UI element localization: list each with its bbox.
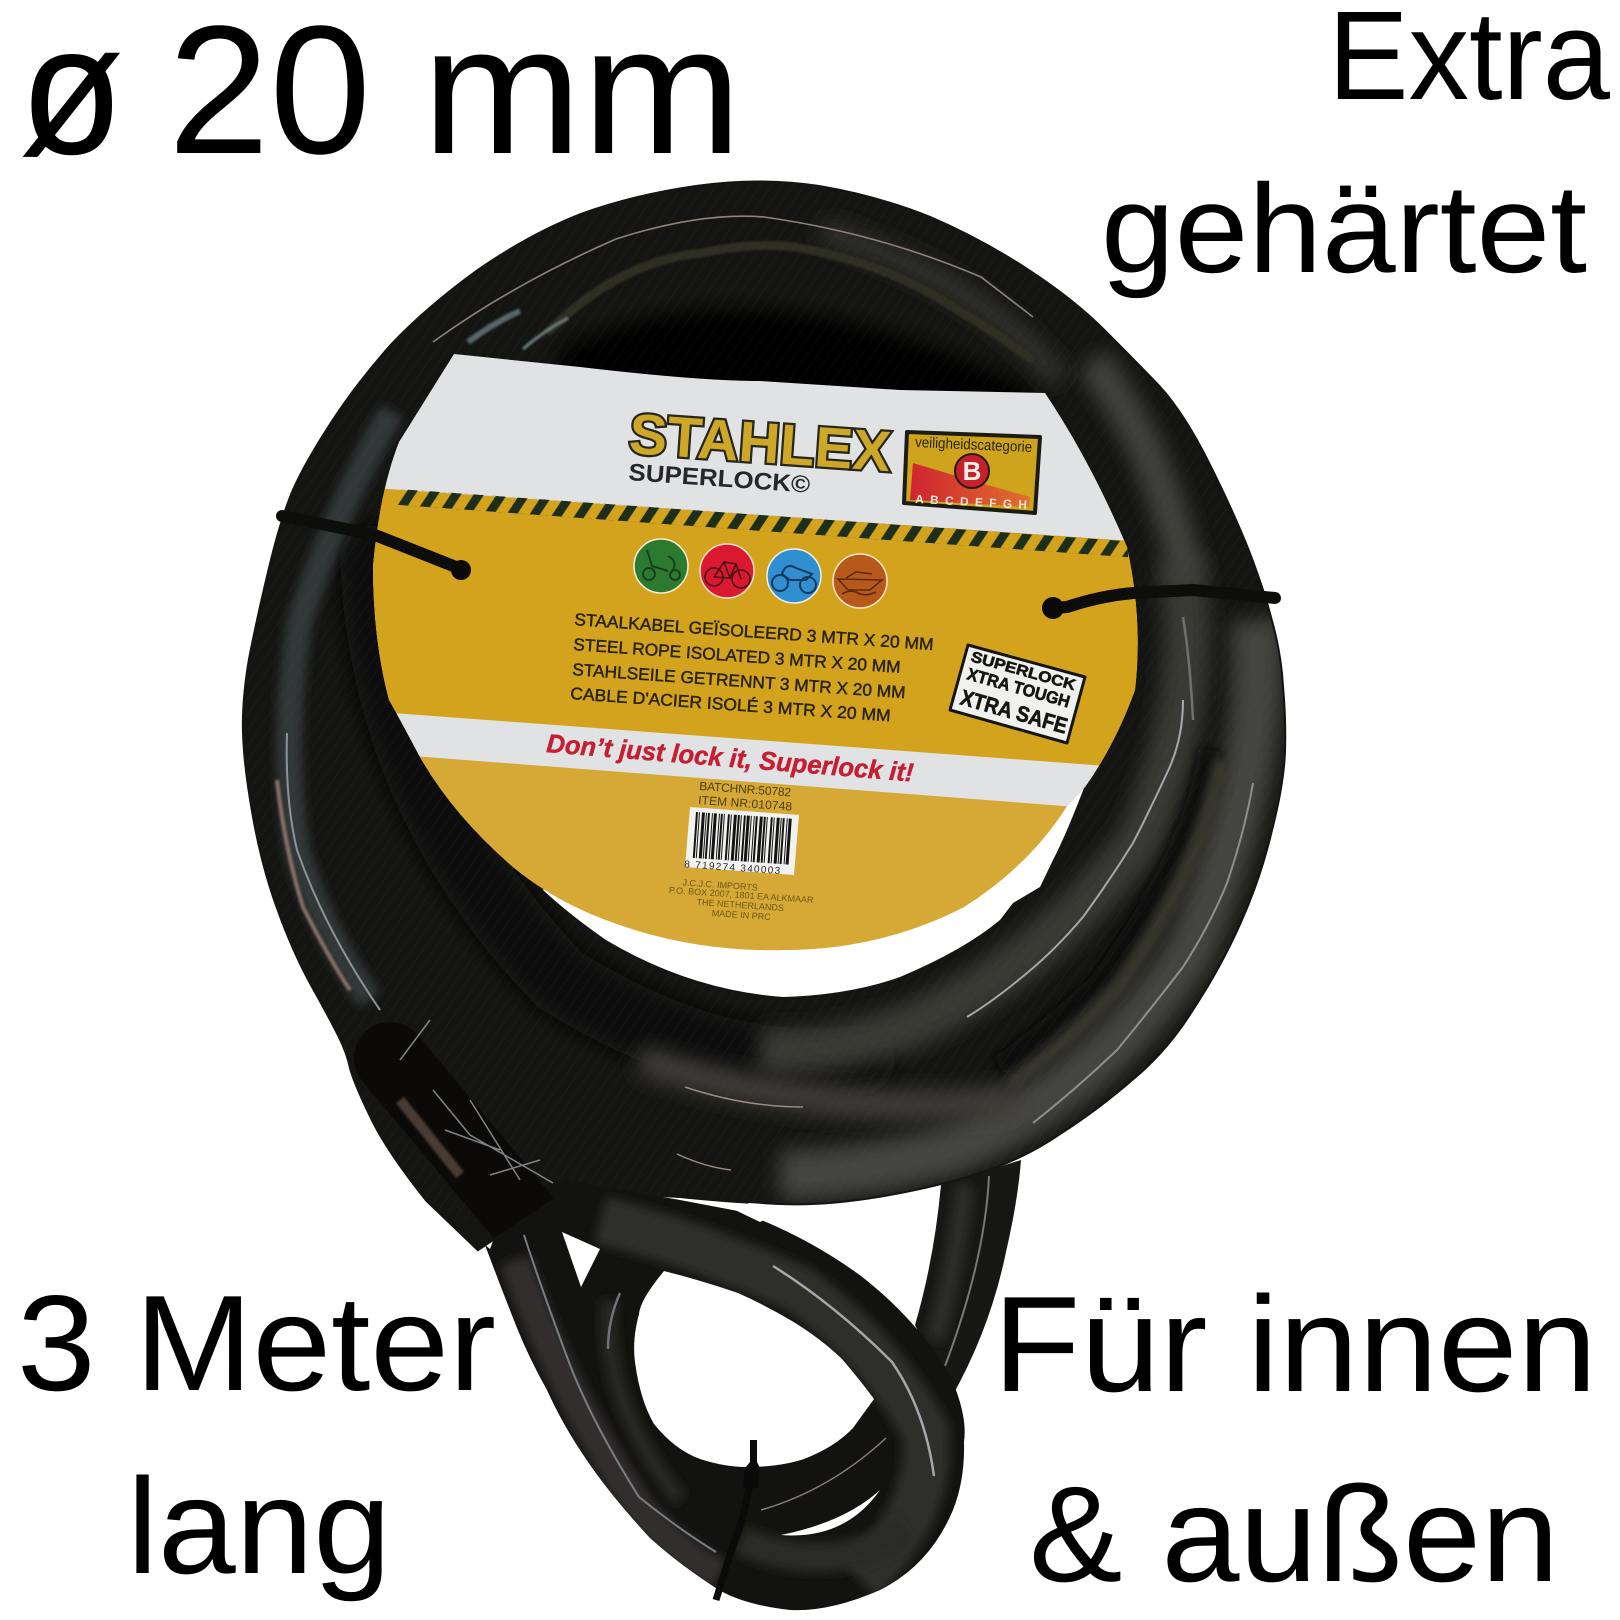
product label: [282, 340, 1275, 960]
brand logo: SUPERLOCK©: [628, 459, 811, 499]
caption: length: [17, 1267, 496, 1602]
caption: length: 3 Meter: [17, 1267, 496, 1419]
sticker: xtra tough: SUPERLOCK: [969, 648, 1078, 694]
label card: [360, 340, 1160, 960]
importer address: MADE IN PRC: [711, 908, 771, 922]
safety category badge: B: [963, 456, 981, 486]
rear strand of the lower loop: [915, 1160, 1021, 1400]
safety category badge: veiligheidscategorie: [915, 434, 1032, 456]
white gaps in the loop: [562, 1203, 880, 1535]
importer address: THE NETHERLANDS: [696, 897, 784, 913]
vehicle icons: [634, 539, 887, 608]
product description text: STAHLSEILE GETRENNT 3 MTR X 20 MM: [572, 660, 906, 702]
importer address: P.O. BOX 2007, 1801 EA ALKMAAR: [669, 885, 814, 905]
product photo: coiled steel cable: [240, 170, 1290, 1610]
icon: boat: [833, 554, 887, 608]
importer address: [669, 877, 814, 922]
batch numbers: BATCHNR:50782: [699, 779, 792, 799]
caption: indoor and outdoor: & außen: [1029, 1458, 1559, 1610]
batch numbers: ITEM NR:010748: [698, 793, 793, 814]
caption: indoor and outdoor: Für innen: [993, 1268, 1597, 1420]
slogan: Don’t just lock it, Superlock it!: [546, 728, 915, 788]
importer address: J.C.J.C. IMPORTS: [682, 877, 758, 893]
crimped clamp: [390, 1020, 553, 1216]
caption: indoor and outdoor: [993, 1268, 1597, 1610]
caption: diameter: [20, 0, 742, 192]
caption: length: lang: [127, 1450, 391, 1602]
product description text: [570, 610, 934, 725]
product description text: STAALKABEL GEÏSOLEERD 3 MTR X 20 MM: [574, 610, 934, 654]
barcode: [684, 807, 799, 878]
white centre gap of the coil: [543, 760, 1087, 997]
cable coil: [240, 170, 1290, 1249]
brand logo: STAHLEX: [627, 402, 893, 484]
caption: extra hardened: [1101, 0, 1611, 299]
icon: bicycle: [700, 544, 754, 598]
product description text: STEEL ROPE ISOLATED 3 MTR X 20 MM: [573, 635, 901, 677]
batch numbers: [698, 779, 793, 814]
product description text: CABLE D'ACIER ISOLÉ 3 MTR X 20 MM: [570, 684, 891, 725]
sticker: xtra tough: XTRA SAFE: [958, 685, 1070, 739]
lower cable loop: [485, 1180, 965, 1610]
safety category badge: ABCDEFGH: [915, 492, 1027, 512]
caption: extra hardened: gehärtet: [1101, 158, 1587, 299]
sticker: xtra tough: [950, 645, 1085, 743]
small cable tie on the loop: [716, 1440, 760, 1600]
safety category badge: [904, 432, 1040, 513]
cable tie: right: [1042, 590, 1275, 619]
barcode: 8 719274 340003: [684, 859, 781, 877]
icon: scooter: [634, 539, 688, 593]
cable tie: left: [282, 516, 471, 580]
icon: motorcycle: [767, 549, 821, 603]
sticker: xtra tough: XTRA TOUGH: [965, 665, 1072, 712]
